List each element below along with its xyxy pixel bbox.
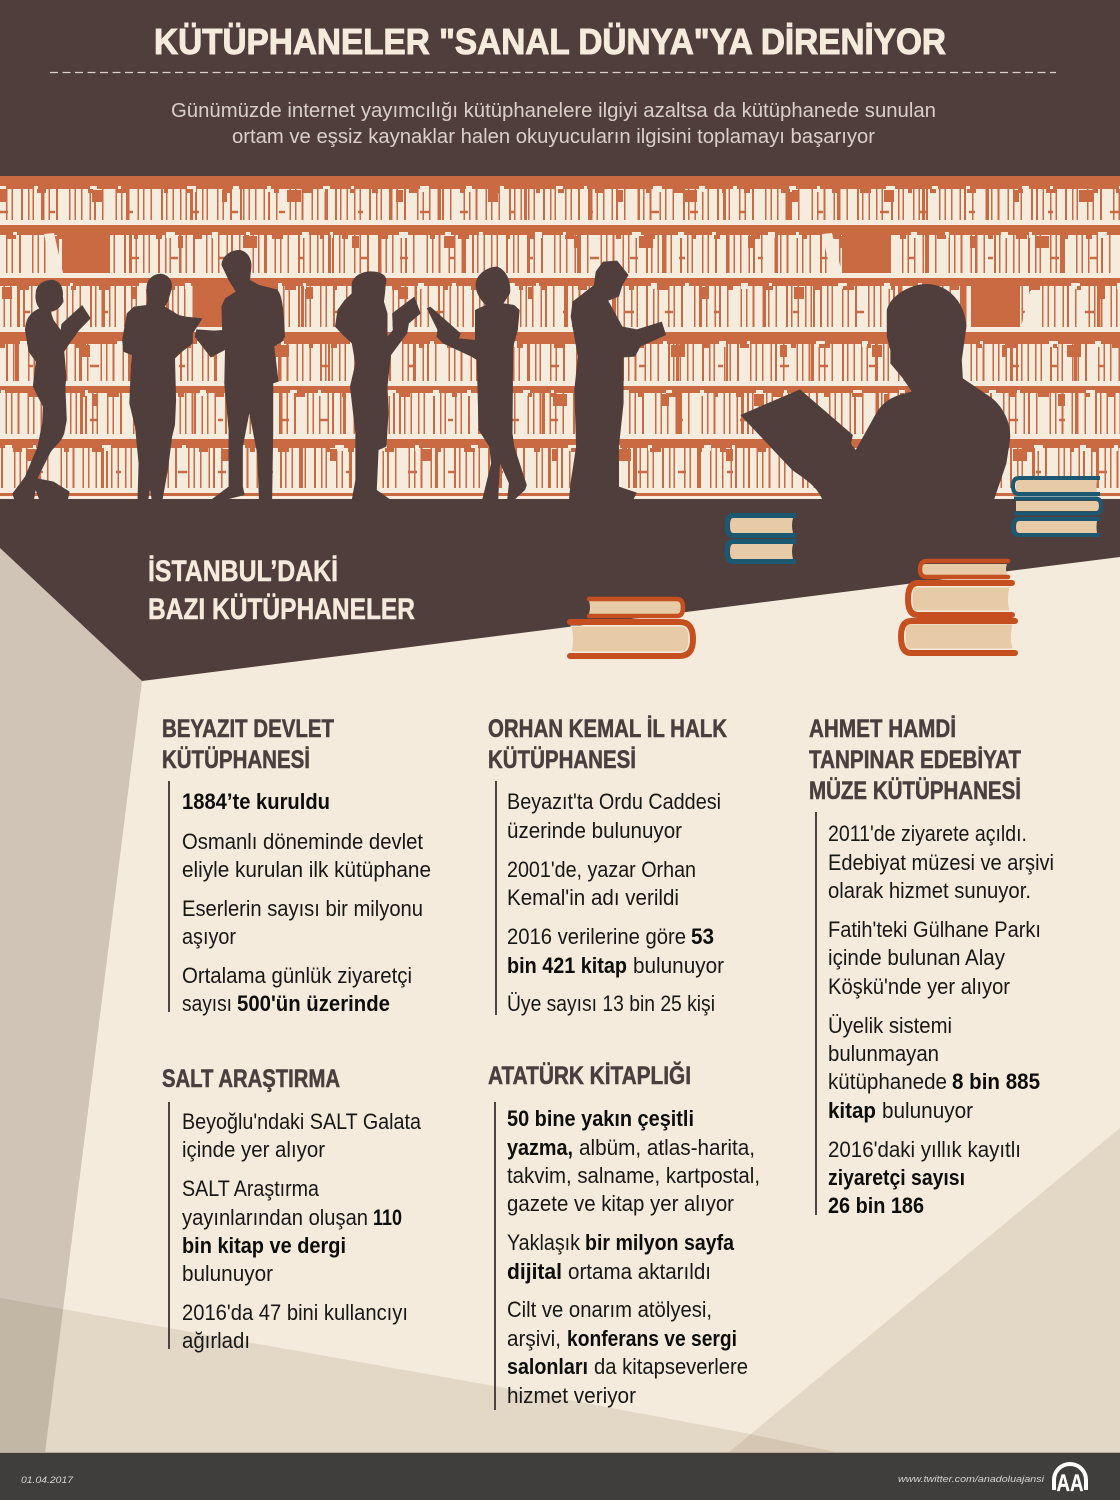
heading: Beyazıt: BEYAZIT DEVLET — [162, 716, 334, 743]
bookshelf illustration — [0, 176, 1120, 499]
text block: Atatürk facts: takvim, salname, kartpostal, — [507, 1163, 760, 1188]
icon: orange book stack right — [901, 561, 1015, 653]
reader 2 — [122, 274, 202, 500]
subtitle: Günümüzde internet yayımcılığı kütüphanelere ilgiyi azaltsa da kütüphanede sunulan — [171, 100, 936, 122]
heading: SALT: SALT ARAŞTIRMA — [162, 1066, 340, 1093]
text block: Tanpınar facts: bulunmayan — [828, 1041, 939, 1066]
icon: blue book pair — [727, 516, 796, 562]
header band — [0, 0, 1120, 177]
heading: Beyazıt: KÜTÜPHANESİ — [162, 747, 310, 774]
footer date: 01.04.2017 — [21, 1475, 74, 1486]
text block: Tanpınar facts: Edebiyat müzesi ve arşivi — [828, 850, 1054, 875]
text block: Atatürk facts: Cilt ve onarım atölyesi, — [507, 1297, 712, 1322]
text block: SALT facts: yayınlarından oluşan — [182, 1205, 368, 1230]
panel: Orhan Kemal İl Halk Kütüphanesi — [488, 716, 727, 1016]
text block: Beyazıt facts — [182, 789, 431, 1016]
text block: Orhan Kemal facts: 2001'de, yazar Orhan — [507, 857, 696, 882]
text block: SALT facts: bin kitap ve dergi — [182, 1233, 346, 1258]
text block: Atatürk facts: konferans ve sergi — [567, 1326, 737, 1351]
text block: Orhan Kemal facts: bin 421 kitap — [507, 953, 627, 978]
text block: Atatürk facts: dijital — [507, 1259, 562, 1284]
text block: Orhan Kemal facts: Kemal'in adı verildi — [507, 885, 679, 910]
section heading: İSTANBUL’DAKİ — [148, 555, 338, 588]
icon: orange book stack left — [570, 599, 693, 656]
text block: Atatürk facts: arşivi, — [507, 1326, 561, 1351]
text block: Orhan Kemal facts: 2016 verilerine göre — [507, 924, 686, 949]
dark floor band — [0, 499, 1120, 681]
heading: Beyazıt — [162, 716, 334, 774]
text block: Tanpınar facts: 2011'de ziyarete açıldı. — [828, 821, 1027, 846]
text block: Tanpınar facts: ziyaretçi sayısı — [828, 1165, 965, 1190]
heading: Ahmet Hamdi Tanpınar: AHMET HAMDİ — [809, 716, 956, 743]
text block: Tanpınar facts: bulunuyor — [882, 1098, 973, 1123]
reader 4 — [335, 271, 421, 500]
icon: agency logo — [1054, 1464, 1086, 1497]
text block: SALT facts: Beyoğlu'ndaki SALT Galata — [182, 1109, 421, 1134]
text block: Tanpınar facts: 8 bin 885 — [952, 1069, 1040, 1094]
text block: Atatürk facts: yazma, — [507, 1135, 573, 1160]
text block: Beyazıt facts: Eserlerin sayısı bir milyonu — [182, 896, 423, 921]
reader 7: large foreground — [740, 284, 1010, 500]
text block: Beyazıt facts: Osmanlı döneminde devlet — [182, 829, 424, 854]
text block: SALT facts: 110 — [373, 1205, 402, 1230]
text block: Beyazıt facts: 1884’te kuruldu — [182, 789, 330, 814]
silhouettes: readers — [12, 250, 1010, 500]
panel: Beyazıt Devlet Kütüphanesi — [162, 716, 431, 1016]
text block: Atatürk facts: albüm, atlas-harita, — [579, 1135, 755, 1160]
text block: Orhan Kemal facts: 53 — [691, 924, 714, 949]
text block: Tanpınar facts: 2016'daki yıllık kayıtlı — [828, 1137, 1021, 1162]
heading: Atatürk: ATATÜRK KİTAPLIĞI — [488, 1062, 691, 1090]
text block: Tanpınar facts: Fatih'teki Gülhane Parkı — [828, 917, 1041, 942]
text block: Atatürk facts: hizmet veriyor — [507, 1383, 636, 1408]
reader 6 — [569, 261, 666, 500]
text block: Beyazıt facts: Ortalama günlük ziyaretçi — [182, 963, 412, 988]
text block: Beyazıt facts: aşıyor — [182, 924, 236, 949]
panel: SALT Araştırma — [162, 1066, 421, 1353]
text block: Orhan Kemal facts: üzerinde bulunuyor — [507, 818, 682, 843]
text block: Atatürk facts: salonları — [507, 1354, 588, 1379]
text block: Orhan Kemal facts: Üye sayısı 13 bin 25 kişi — [507, 991, 715, 1016]
reader 1 — [12, 280, 91, 500]
text block: Tanpınar facts: olarak hizmet sunuyor. — [828, 878, 1031, 903]
footer bar — [0, 1452, 1120, 1500]
text block: Tanpınar facts: Üyelik sistemi — [828, 1013, 952, 1038]
text block: Tanpınar facts: içinde bulunan Alay — [828, 945, 1006, 970]
text block: Tanpınar facts: kitap — [828, 1098, 876, 1123]
text block: Beyazıt facts: 500'ün üzerinde — [237, 991, 390, 1016]
text block: SALT facts: ağırladı — [182, 1328, 250, 1353]
title: KÜTÜPHANELER "SANAL DÜNYA"YA DİRENİYOR — [154, 21, 946, 62]
text block: Tanpınar facts: Köşkü'nde yer alıyor — [828, 974, 1010, 999]
text block: Atatürk facts: ortama aktarıldı — [568, 1259, 711, 1284]
heading: Orhan Kemal — [488, 716, 727, 774]
reader 5 — [427, 267, 527, 500]
panel: Ahmet Hamdi Tanpınar Edebiyat Müze Kütüphanesi — [809, 716, 1054, 1218]
text block: Tanpınar facts: kütüphanede — [828, 1069, 947, 1094]
text block: Atatürk facts: Yaklaşık — [507, 1230, 581, 1255]
subtitle — [171, 100, 936, 148]
text block: Atatürk facts: da kitapseverlere — [594, 1354, 748, 1379]
text block: Orhan Kemal facts: bulunuyor — [633, 953, 724, 978]
text block: Tanpınar facts — [828, 821, 1054, 1218]
text block: SALT facts: 2016'da 47 bini kullancıyı — [182, 1300, 408, 1325]
text block: Orhan Kemal facts — [507, 789, 724, 1016]
text block: Beyazıt facts: eliyle kurulan ilk kütüphane — [182, 857, 431, 882]
text block: Atatürk facts: bir milyon sayfa — [585, 1230, 734, 1255]
icon: agency logo: AA — [1056, 1470, 1084, 1497]
text block: SALT facts: bulunuyor — [182, 1261, 273, 1286]
heading: Ahmet Hamdi Tanpınar — [809, 716, 1021, 805]
text block: Orhan Kemal facts: Beyazıt'ta Ordu Caddesi — [507, 789, 721, 814]
panel: Atatürk Kitaplığı — [488, 1062, 760, 1410]
section heading: BAZI KÜTÜPHANELER — [148, 593, 415, 626]
text block: Atatürk facts: gazete ve kitap yer alıyor — [507, 1191, 734, 1216]
reader 3 — [195, 250, 285, 500]
text block: SALT facts: içinde yer alıyor — [182, 1137, 325, 1162]
footer twitter link: www.twitter.com/anadoluajansi — [898, 1474, 1045, 1485]
text block: Atatürk facts — [507, 1106, 760, 1408]
subtitle: ortam ve eşsiz kaynaklar halen okuyucuların ilgisini toplamayı başarıyor — [232, 126, 875, 148]
section heading — [148, 555, 415, 626]
heading: Ahmet Hamdi Tanpınar: MÜZE KÜTÜPHANESİ — [809, 778, 1021, 805]
text block: Beyazıt facts: sayısı — [182, 991, 232, 1016]
text block: Atatürk facts: 50 bine yakın çeşitli — [507, 1106, 694, 1131]
text block: Tanpınar facts: 26 bin 186 — [828, 1193, 924, 1218]
heading: Orhan Kemal: KÜTÜPHANESİ — [488, 747, 636, 774]
heading: Orhan Kemal: ORHAN KEMAL İL HALK — [488, 716, 727, 743]
text block: SALT facts: SALT Araştırma — [182, 1176, 319, 1201]
icon: blue book trio — [1013, 478, 1101, 535]
heading: Ahmet Hamdi Tanpınar: TANPINAR EDEBİYAT — [809, 747, 1021, 774]
text block: SALT facts — [182, 1109, 421, 1353]
